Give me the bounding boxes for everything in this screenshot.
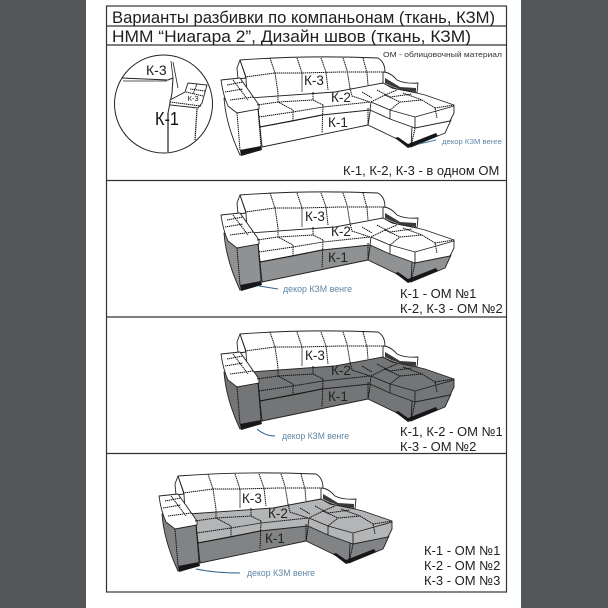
sofa illustration: К-2 [331, 90, 351, 105]
sofa illustration: К-2 [331, 363, 351, 378]
left gray margin [0, 0, 86, 608]
decor callout [196, 568, 315, 578]
caption: К-2 - ОМ №2 [424, 558, 500, 573]
decor callout: декор КЗМ венге [247, 568, 315, 578]
sofa illustration: К-1 [328, 250, 348, 265]
sofa illustration: К-3 [305, 348, 325, 363]
caption: К-1, К-2 - ОМ №1 [400, 424, 503, 439]
sofa illustration: К-3 [242, 491, 262, 506]
panel: three materials [159, 473, 500, 588]
sofa illustration: К-3 [305, 209, 325, 224]
right gray margin [521, 0, 608, 608]
title line 2: НММ “Ниагара 2”, Дизайн швов (ткань, КЗМ) [112, 27, 471, 46]
panel: two materials, variant A [221, 192, 503, 316]
decor callout [257, 429, 349, 441]
sofa illustration: К-2 [268, 506, 288, 521]
inset detail circle [114, 55, 212, 153]
sofa illustration: К-1 [328, 115, 348, 130]
panel: two materials, variant B [221, 331, 503, 454]
caption: К-1, К-2, К-3 - в одном ОМ [343, 163, 499, 178]
caption [400, 286, 503, 316]
caption [400, 424, 503, 454]
inset detail circle: К-1 [155, 109, 179, 129]
caption: К-3 - ОМ №3 [424, 573, 500, 588]
panel: single material [114, 50, 502, 178]
inset detail circle: К-3 [187, 94, 199, 103]
sofa illustration [221, 192, 454, 291]
inset labels: К-3 [146, 62, 167, 78]
sofa illustration [159, 473, 392, 572]
sofa illustration: К-1 [328, 389, 348, 404]
note: facing material: ОМ - облицовочный материал [383, 50, 502, 59]
sofa illustration: К-2 [331, 224, 351, 239]
caption: К-2, К-3 - ОМ №2 [400, 301, 503, 316]
sofa illustration: К-3 [304, 73, 324, 88]
caption: К-3 - ОМ №2 [400, 439, 476, 454]
caption: К-1 - ОМ №1 [400, 286, 476, 301]
sofa illustration [221, 57, 454, 156]
sofa illustration: К-1 [265, 531, 285, 546]
caption [424, 543, 500, 588]
title line 1: Варианты разбивки по компаньонам (ткань, КЗМ) [112, 8, 495, 27]
frame [106, 6, 506, 592]
sofa illustration [221, 331, 454, 430]
decor callout: декор КЗМ венге [442, 137, 502, 146]
caption: К-1 - ОМ №1 [424, 543, 500, 558]
decor callout: декор КЗМ венге [282, 431, 349, 441]
decor callout: декор КЗМ венге [283, 284, 352, 294]
